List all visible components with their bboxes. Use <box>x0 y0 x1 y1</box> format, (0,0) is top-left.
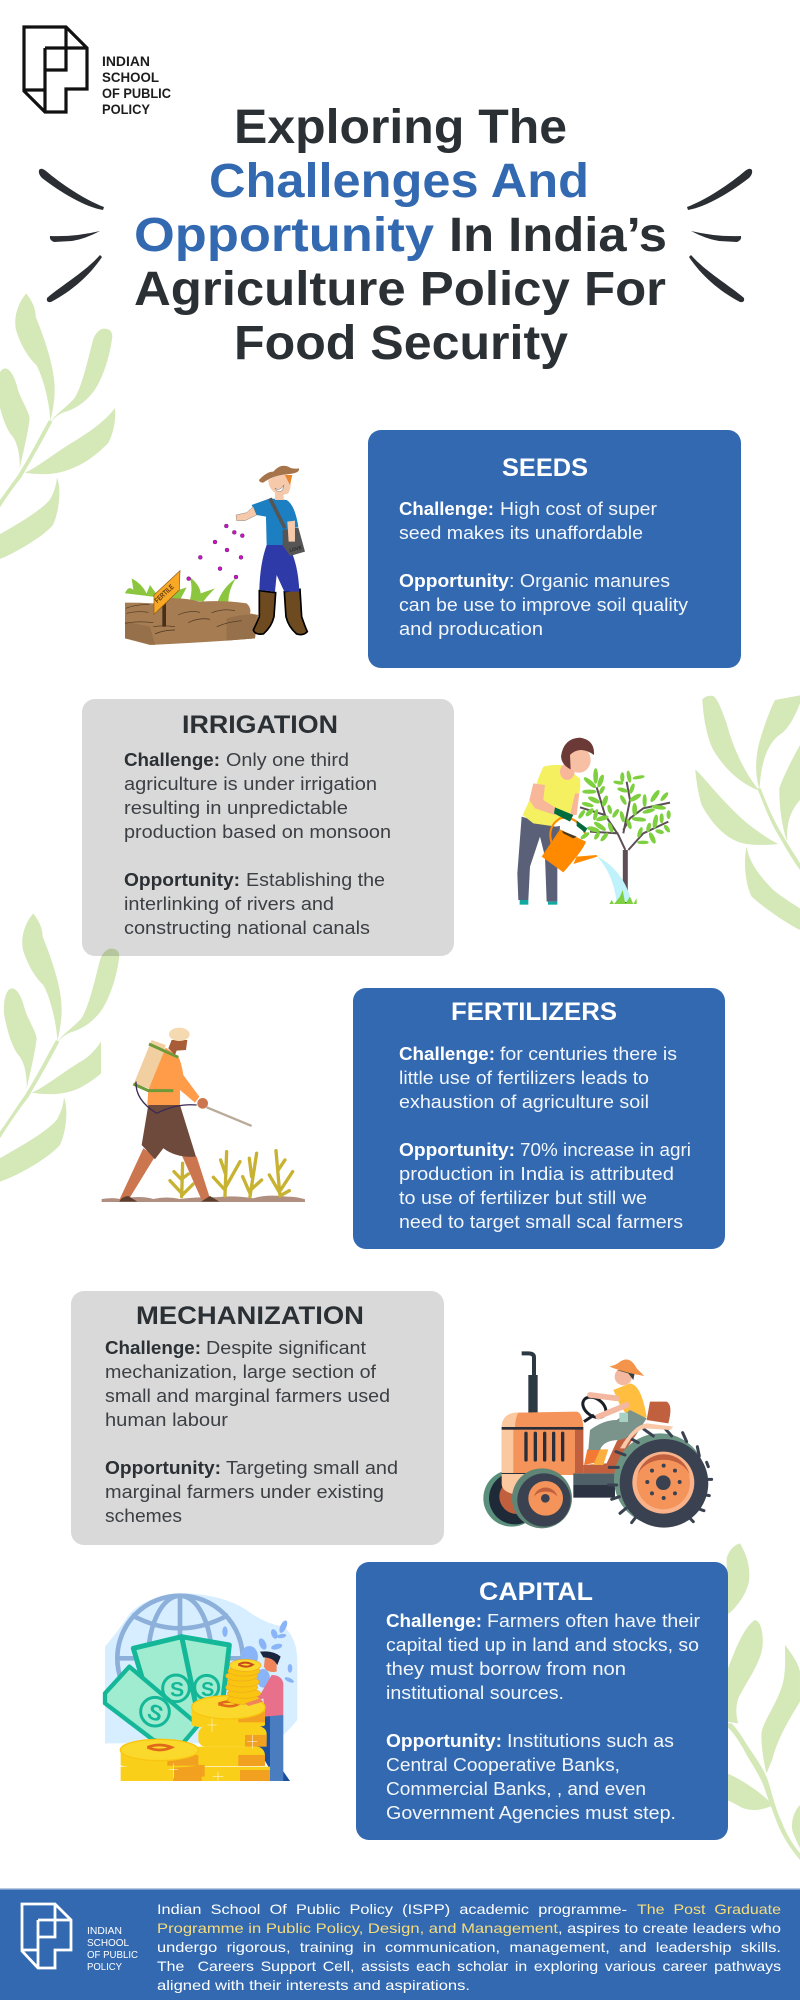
footer paragraph: The Post Graduate <box>637 1901 781 1917</box>
title: Challenges And <box>209 155 589 208</box>
fertilizers challenge text: little use of fertilizers leads to <box>399 1068 649 1088</box>
fertilizers opportunity text: production in India is attributed <box>399 1164 674 1184</box>
title <box>134 101 667 370</box>
footer paragraph: , aspires to create leaders who <box>558 1920 781 1936</box>
fertilizers challenge text <box>399 1044 677 1112</box>
capital heading: CAPITAL <box>479 1578 593 1606</box>
panel: mechanization <box>71 1291 444 1545</box>
seeds opportunity text <box>399 571 688 639</box>
panel: fertilizers <box>353 988 725 1249</box>
irrigation challenge text: Challenge: <box>124 750 220 770</box>
mechanization challenge text: mechanization, large section of <box>105 1362 377 1382</box>
irrigation challenge text: agriculture is under irrigation <box>124 774 377 794</box>
decorative leaf sprig: top left <box>0 293 115 562</box>
decorative leaf sprig: lower right <box>727 1543 800 1860</box>
mechanization challenge text <box>105 1338 390 1430</box>
decorative leaf sprig: right side <box>695 695 800 930</box>
logo wordmark: OF PUBLIC <box>102 85 171 101</box>
irrigation heading: IRRIGATION <box>182 711 338 739</box>
footer paragraph: The Careers Support Cell, assists each scholar in exploring various career pathways <box>157 1958 781 1974</box>
footer logo: INDIAN <box>87 1925 122 1937</box>
accent strokes: right of title <box>687 169 752 302</box>
capital challenge text: Challenge: <box>386 1611 482 1631</box>
logo wordmark <box>102 53 171 117</box>
fertilizers challenge text: Challenge: <box>399 1044 495 1064</box>
accent strokes: left of title <box>39 169 104 302</box>
footer logo: POLICY <box>87 1961 122 1973</box>
footer paragraph <box>157 1901 781 1993</box>
capital challenge text: institutional sources. <box>386 1683 564 1703</box>
capital opportunity text: Central Cooperative Banks, <box>386 1755 620 1775</box>
seeds challenge text: High cost of super <box>500 499 657 519</box>
fertilizers opportunity text: to use of fertilizer but still we <box>399 1188 647 1208</box>
title: Exploring The <box>234 101 567 154</box>
capital opportunity text: Commercial Banks, , and even <box>386 1779 646 1799</box>
seeds opportunity text: can be use to improve soil quality <box>399 595 688 615</box>
logo wordmark: INDIAN <box>102 53 150 69</box>
footer band <box>0 1888 800 2000</box>
capital challenge text <box>386 1611 700 1703</box>
mechanization opportunity text: Targeting small and <box>226 1458 398 1478</box>
panel: capital <box>356 1562 728 1840</box>
logo: Indian School of Public Policy <box>24 27 171 117</box>
illustration: person stacking coins and banknotes: S <box>144 1698 167 1727</box>
footer logo: SCHOOL <box>87 1937 129 1949</box>
illustration: farmer sowing seeds: LOVE <box>289 545 302 553</box>
title: Opportunity <box>134 209 434 262</box>
seeds challenge text: seed makes its unaffordable <box>399 523 643 543</box>
capital opportunity text: Opportunity: <box>386 1731 502 1751</box>
seeds heading: SEEDS <box>502 454 588 482</box>
capital challenge text: capital tied up in land and stocks, so <box>386 1635 699 1655</box>
illustration: farmer spraying crops <box>102 1028 305 1202</box>
capital opportunity text: Government Agencies must step. <box>386 1803 676 1823</box>
irrigation opportunity text: Opportunity: <box>124 870 240 890</box>
seeds opportunity text: Opportunity <box>399 571 509 591</box>
illustration: person stacking coins and banknotes <box>105 1593 297 1781</box>
irrigation challenge text: production based on monsoon <box>124 822 391 842</box>
title: In India’s <box>449 209 667 262</box>
logo wordmark: SCHOOL <box>102 69 159 85</box>
irrigation challenge text <box>124 750 391 842</box>
logo mark <box>24 27 87 112</box>
fertilizers opportunity text: Opportunity: <box>399 1140 515 1160</box>
panel: irrigation <box>82 699 454 956</box>
panel: seeds <box>368 430 741 668</box>
title: Food Security <box>234 317 568 370</box>
footer logo <box>22 1904 138 1973</box>
footer paragraph: Indian School Of Public Policy (ISPP) academic programme- <box>157 1901 627 1917</box>
capital opportunity text <box>386 1731 676 1823</box>
irrigation opportunity text: constructing national canals <box>124 918 370 938</box>
footer paragraph: aligned with their interests and aspirations. <box>157 1977 470 1993</box>
fertilizers heading: FERTILIZERS <box>451 998 617 1026</box>
illustration: farmer on tractor <box>483 1353 712 1528</box>
capital opportunity text: Institutions such as <box>507 1731 674 1751</box>
illustration: farmer sowing seeds <box>125 466 307 645</box>
fertilizers opportunity text: need to target small scal farmers <box>399 1212 683 1232</box>
seeds opportunity text: and producation <box>399 619 543 639</box>
mechanization opportunity text <box>105 1458 398 1526</box>
fertilizers challenge text: exhaustion of agriculture soil <box>399 1092 649 1112</box>
seeds opportunity text: : Organic manures <box>509 571 670 591</box>
logo wordmark: POLICY <box>102 101 151 117</box>
illustration: farmer sowing seeds: FERTILE <box>153 582 176 605</box>
seeds challenge text: Challenge: <box>399 499 494 519</box>
mechanization challenge text: Challenge: <box>105 1338 201 1358</box>
irrigation challenge text: Only one third <box>226 750 349 770</box>
mechanization challenge text: human labour <box>105 1410 228 1430</box>
irrigation challenge text: resulting in unpredictable <box>124 798 348 818</box>
footer paragraph: Programme in Public Policy, Design, and Management <box>157 1920 558 1936</box>
illustration: person stacking coins and banknotes: S <box>201 1679 214 1701</box>
fertilizers challenge text: for centuries there is <box>500 1044 677 1064</box>
capital challenge text: they must borrow from non <box>386 1659 626 1679</box>
irrigation opportunity text <box>124 870 385 938</box>
irrigation opportunity text: interlinking of rivers and <box>124 894 334 914</box>
mechanization opportunity text: Opportunity: <box>105 1458 221 1478</box>
mechanization opportunity text: marginal farmers under existing <box>105 1482 384 1502</box>
irrigation opportunity text: Establishing the <box>246 870 385 890</box>
mechanization heading: MECHANIZATION <box>136 1302 364 1330</box>
fertilizers opportunity text <box>399 1140 691 1232</box>
capital challenge text: Farmers often have their <box>487 1611 700 1631</box>
mechanization opportunity text: schemes <box>105 1506 182 1526</box>
footer logo: OF PUBLIC <box>87 1949 138 1961</box>
mechanization challenge text: Despite significant <box>206 1338 366 1358</box>
mechanization challenge text: small and marginal farmers used <box>105 1386 390 1406</box>
seeds challenge text <box>399 499 657 543</box>
title: Agriculture Policy For <box>134 263 666 316</box>
fertilizers opportunity text: 70% increase in agri <box>520 1140 691 1160</box>
illustration: person stacking coins and banknotes: S <box>170 1678 184 1702</box>
decorative leaf sprig: left middle (overlaps irrigation panel) <box>0 913 119 1182</box>
illustration: woman watering a tree <box>517 738 671 905</box>
footer paragraph: undergo rigorous, training in communication, management, and leadership skills. <box>157 1939 781 1955</box>
